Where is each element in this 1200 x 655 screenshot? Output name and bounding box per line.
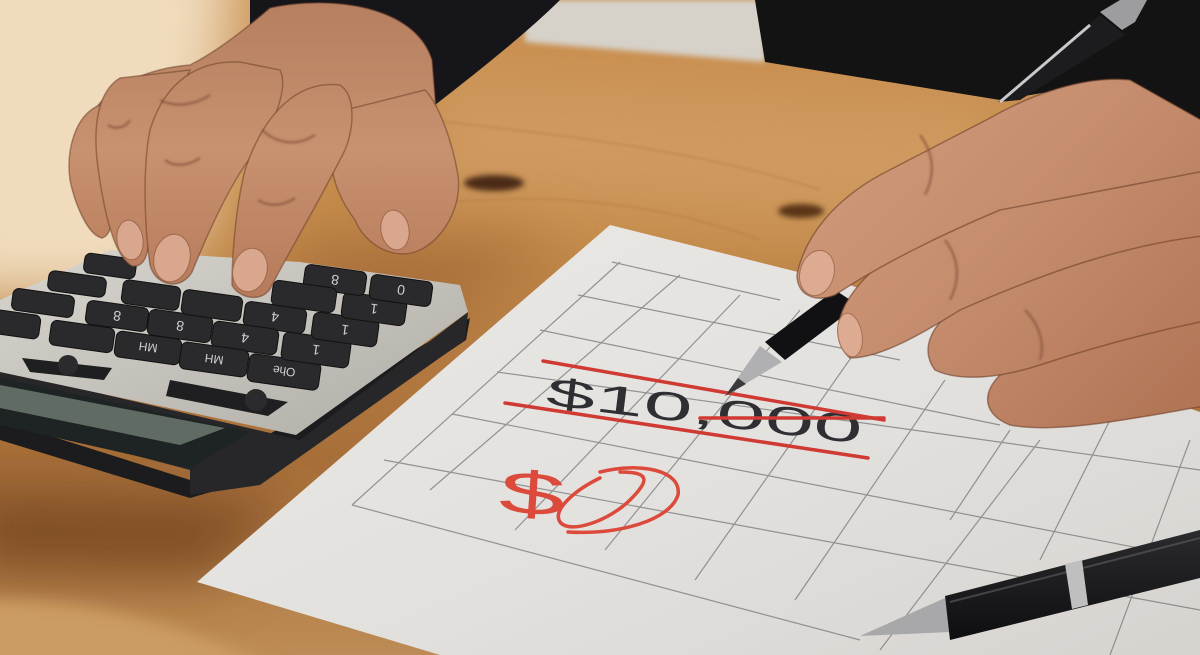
fingernails xyxy=(795,246,866,359)
fingernails xyxy=(114,208,412,296)
knuckle creases xyxy=(108,95,315,205)
calculator key labels: 8 xyxy=(175,318,185,334)
middle finger xyxy=(838,165,1200,358)
red zero amount xyxy=(497,458,678,532)
calculator display xyxy=(0,378,250,468)
little finger xyxy=(988,310,1200,428)
pinky finger xyxy=(69,105,118,238)
sheet of paper xyxy=(197,225,1200,655)
pen lying on paper xyxy=(860,530,1200,640)
calculator key labels: 0 xyxy=(396,282,406,298)
calculator key labels: Ohe xyxy=(272,362,296,380)
hand-drawn grid xyxy=(352,262,1200,655)
knuckle creases xyxy=(920,135,1042,360)
back of hand xyxy=(95,3,436,130)
crossed-out amount xyxy=(505,361,884,458)
calculator key labels: 4 xyxy=(240,330,250,346)
red strike-through lines xyxy=(505,361,884,458)
left hand pressing calculator xyxy=(69,3,459,297)
background: wall, sleeve and dark clothing xyxy=(250,0,1200,125)
calculator key labels: 4 xyxy=(270,309,280,325)
thumb xyxy=(331,90,459,254)
right hand holding pen xyxy=(795,79,1200,428)
calculator xyxy=(0,250,470,498)
calculator key labels: 8 xyxy=(112,308,122,324)
calculator key labels: MH xyxy=(204,351,224,367)
calculator key labels: 1 xyxy=(369,301,379,317)
calculator key labels: MH xyxy=(138,339,158,355)
ring finger xyxy=(928,230,1200,377)
calculator key labels: 1 xyxy=(340,322,350,338)
red zero amount: $ xyxy=(497,458,568,530)
calculator keys xyxy=(0,252,433,391)
ring finger xyxy=(96,70,190,266)
calculator key labels: 1 xyxy=(311,342,321,358)
index finger xyxy=(797,79,1200,298)
calculator key labels: 8 xyxy=(330,272,340,288)
pen held in right hand xyxy=(725,0,1147,396)
calculator key labels xyxy=(112,272,406,380)
crossed-out amount: $10,000 xyxy=(544,370,865,453)
index finger xyxy=(232,84,352,297)
middle finger xyxy=(145,62,283,284)
